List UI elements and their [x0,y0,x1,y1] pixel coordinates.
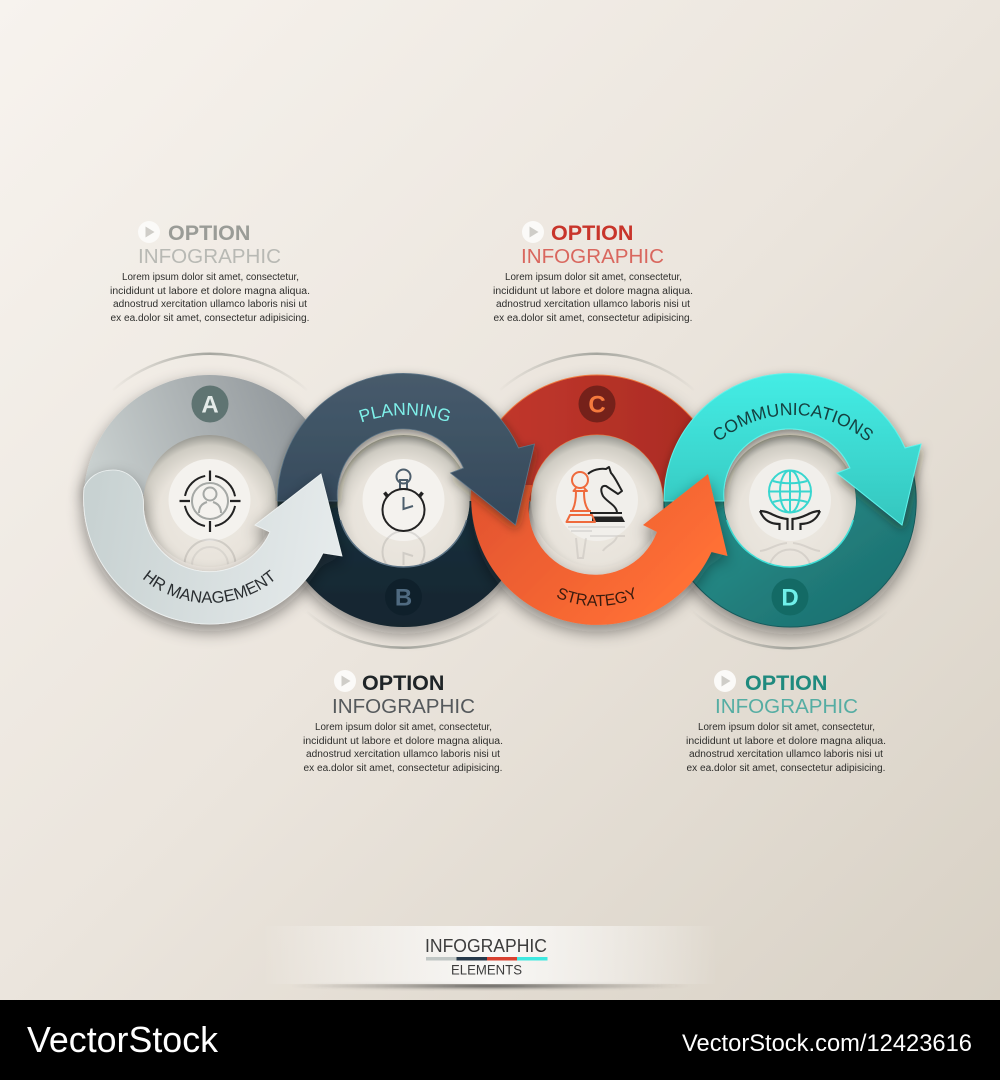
option block B: INFOGRAPHIC [332,695,475,718]
watermark bar [0,1000,1000,1080]
play icon A [138,221,160,243]
center hole D with globe icon [724,435,856,568]
option block B: Lorem ipsum dolor sit amet, consectetur, [315,722,492,733]
icon: pawn and knight [566,467,625,522]
icon: globe held by hands [760,470,820,530]
play icon B [334,670,356,692]
option block B: incididunt ut labore et dolore magna aliqua. [303,736,503,747]
option block D: INFOGRAPHIC [715,695,858,718]
letter badge A [192,386,228,422]
option block D: Lorem ipsum dolor sit amet, consectetur, [698,722,875,733]
letter badge A: A [201,392,219,418]
letter badge C: C [588,392,606,418]
option block B: ex ea.dolor sit amet, consectetur adipisicing. [304,763,502,774]
option block B [303,670,503,774]
arrow A: HR management grey arrow [73,467,344,642]
center hole A with target icon [144,435,276,567]
icon: target with person [180,470,240,532]
option block B: OPTION [362,671,444,695]
ring C back: red top arc [471,375,723,501]
play icon C [522,221,544,243]
option block A: ex ea.dolor sit amet, consectetur adipisicing. [110,313,310,324]
arrow C: strategy orange arrow [461,474,733,642]
option block D [686,670,886,774]
arrow B: planning blue arrow [272,370,540,533]
label: planning: PLANNING [359,402,450,422]
option block A: INFOGRAPHIC [138,245,281,268]
watermark bar: VectorStock [27,1019,219,1060]
letter badge D: D [781,584,799,612]
letter badge B: B [395,584,412,612]
ring A back: grey top arc [84,375,336,501]
label: HR management: HR MANAGEMENT [143,570,274,603]
footer banner: ELEMENTS [451,962,522,978]
footer banner: INFOGRAPHIC [425,936,547,956]
option block C: Lorem ipsum dolor sit amet, consectetur, [505,272,682,283]
option block C: INFOGRAPHIC [521,245,664,268]
option block D: ex ea.dolor sit amet, consectetur adipisicing. [686,763,886,774]
option block B: adnostrud xercitation ullamco laboris nisi ut [306,749,500,760]
play icon D [714,670,736,692]
option block A: OPTION [168,221,250,245]
option block C [493,221,693,324]
label: communications: COMMUNICATIONS [714,402,873,440]
option block D: adnostrud xercitation ullamco laboris nisi ut [689,749,883,760]
icon: stopwatch [382,470,424,531]
option block C: OPTION [551,221,633,245]
ring B back: dark bottom arc [278,501,530,627]
option block A: Lorem ipsum dolor sit amet, consectetur, [122,272,299,283]
option block C: adnostrud xercitation ullamco laboris nisi ut [496,299,690,310]
arrow D: communications teal arrow [658,370,928,532]
center hole C with chess icon [531,435,663,567]
option block D: OPTION [745,671,827,695]
letter badge B [385,578,422,616]
letter badge C [578,386,616,422]
watermark bar: VectorStock.com/12423616 [682,1030,972,1057]
label: strategy: STRATEGY [557,587,634,606]
option block D: incididunt ut labore et dolore magna aliqua. [686,736,886,747]
option block C: incididunt ut labore et dolore magna aliqua. [493,286,693,297]
center hole B with stopwatch icon [338,435,470,573]
ring D back: teal bottom arc [664,449,916,627]
option block C: ex ea.dolor sit amet, consectetur adipisicing. [494,313,692,324]
concentric decorative arcs [113,354,887,648]
footer banner [262,926,718,990]
option block A: adnostrud xercitation ullamco laboris nisi ut [113,299,307,310]
letter badge D [772,578,808,616]
option block A: incididunt ut labore et dolore magna aliqua. [110,286,310,297]
option block A [110,221,310,324]
